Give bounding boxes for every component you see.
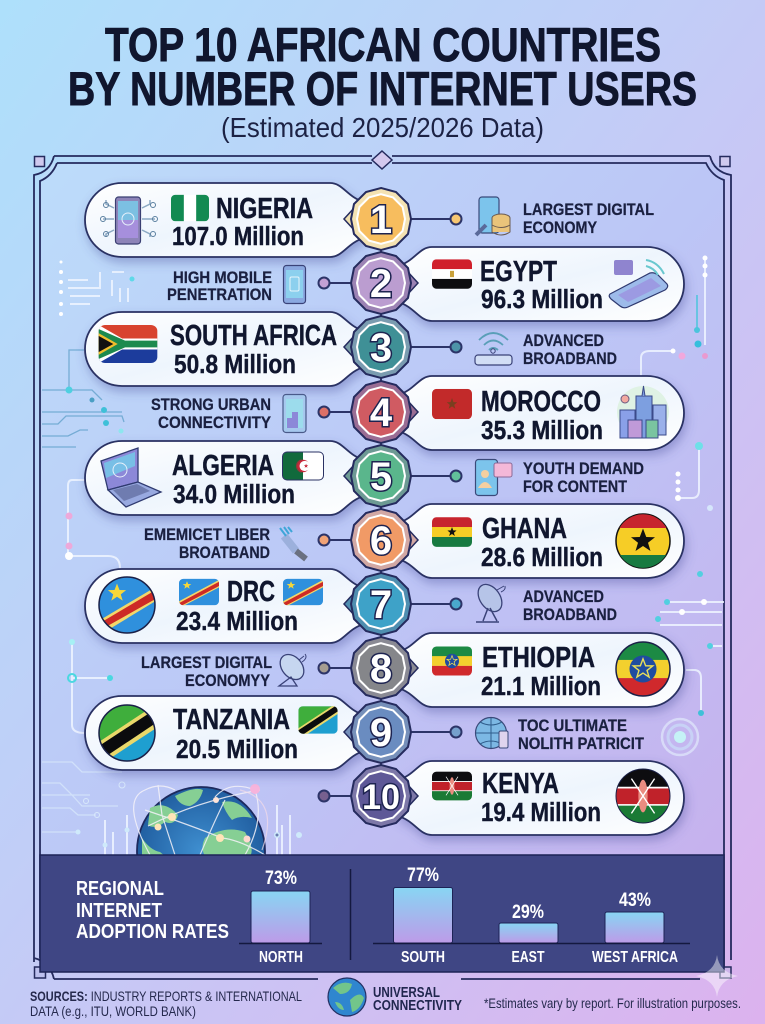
row 9: Tanzania: 20.5 Million bbox=[176, 736, 298, 764]
note 5 bbox=[476, 459, 644, 496]
sources: SOURCES: INDUSTRY REPORTS & INTERNATIONAL bbox=[30, 988, 302, 1004]
flag: Nigeria bbox=[171, 195, 209, 221]
panel heading: ADOPTION RATES bbox=[76, 920, 229, 943]
title: TOP 10 AFRICAN COUNTRIES bbox=[105, 18, 661, 71]
note 2: PENETRATION bbox=[167, 285, 272, 304]
flag: DRC right bbox=[283, 578, 323, 606]
icon: fibre cable bbox=[280, 527, 306, 559]
flag: DRC left bbox=[179, 578, 219, 606]
row 5: Algeria bbox=[85, 441, 364, 515]
note 4 bbox=[151, 394, 306, 432]
row 2: Egypt: EGYPT bbox=[480, 256, 557, 288]
row 3: South Africa: SOUTH AFRICA bbox=[170, 320, 337, 352]
bar chart: adoption rates: 29% bbox=[512, 902, 544, 923]
flag badge: Ghana bbox=[616, 514, 670, 568]
flag: Morocco bbox=[432, 389, 472, 419]
icon: globe and phone bbox=[476, 718, 508, 748]
note 1: LARGEST DIGITAL bbox=[523, 200, 654, 219]
row 8: Ethiopia: ETHIOPIA bbox=[482, 642, 595, 674]
row 6: Ghana: GHANA bbox=[482, 513, 567, 545]
bar chart: adoption rates: SOUTH bbox=[401, 949, 445, 966]
bar chart: adoption rates: WEST AFRICA bbox=[592, 949, 678, 966]
note 3: BROADBAND bbox=[523, 349, 617, 368]
sources bbox=[30, 988, 302, 1019]
universal connectivity logo: CONNECTIVITY bbox=[373, 998, 462, 1014]
rank medallion 2: 2 bbox=[370, 262, 392, 306]
rank medallion 4: 4 bbox=[370, 391, 393, 435]
title bbox=[68, 18, 697, 115]
note 8 bbox=[141, 650, 309, 690]
universal connectivity logo bbox=[328, 978, 462, 1016]
row 1: Nigeria: NIGERIA bbox=[216, 193, 313, 225]
icon: phone with wifi bbox=[609, 260, 668, 308]
note 2: HIGH MOBILE bbox=[173, 268, 272, 287]
note 5: FOR CONTENT bbox=[523, 477, 628, 496]
decorative frame bbox=[34, 151, 731, 979]
row 6: Ghana: 28.6 Million bbox=[481, 544, 603, 572]
row 10: Kenya: 19.4 Million bbox=[481, 799, 601, 827]
rank medallion 8 bbox=[351, 637, 418, 699]
icon: mobile phone bbox=[284, 266, 306, 304]
icon: satellite dish bbox=[473, 580, 507, 622]
bar chart: adoption rates bbox=[239, 865, 690, 966]
rank medallion 7 bbox=[344, 573, 411, 635]
row 4: Morocco: 35.3 Million bbox=[481, 417, 603, 445]
panel heading bbox=[76, 877, 229, 943]
globe illustration bbox=[133, 784, 268, 854]
bar chart: adoption rates: EAST bbox=[512, 949, 545, 966]
note 1: ECONOMY bbox=[523, 218, 598, 237]
flag: Ghana bbox=[432, 517, 472, 548]
icon: smartphone with circuit bbox=[100, 197, 158, 244]
rank medallion 5: 5 bbox=[370, 455, 392, 499]
panel: regional internet adoption rates bbox=[40, 855, 724, 972]
bar chart: adoption rates: 77% bbox=[407, 865, 439, 886]
note 3: ADVANCED bbox=[523, 331, 604, 350]
row 3: South Africa: 50.8 Million bbox=[174, 351, 296, 379]
rank medallion 6: 6 bbox=[370, 519, 392, 563]
row 7: DRC bbox=[85, 569, 364, 643]
rank medallion 9 bbox=[344, 701, 411, 763]
row 1: Nigeria: 107.0 Million bbox=[172, 223, 304, 251]
flag badge: Tanzania bbox=[98, 704, 156, 762]
rank medallion 3 bbox=[344, 316, 411, 378]
flag: Egypt bbox=[432, 259, 472, 289]
row 9: Tanzania: TANZANIA bbox=[173, 704, 290, 736]
panel heading: INTERNET bbox=[76, 899, 162, 922]
icon: phone with city chart bbox=[283, 394, 306, 432]
circuit decoration right bbox=[641, 256, 724, 755]
rank medallion 4 bbox=[351, 381, 418, 443]
note 5: YOUTH DEMAND bbox=[523, 459, 644, 478]
icon: globe bbox=[328, 978, 366, 1016]
icon: wifi router bbox=[475, 333, 512, 365]
row 7: DRC: 23.4 Million bbox=[176, 608, 298, 636]
note 1 bbox=[476, 197, 654, 237]
note 3 bbox=[475, 331, 617, 368]
bar chart: adoption rates: NORTH bbox=[259, 949, 303, 966]
flag: Ethiopia bbox=[432, 646, 472, 676]
rank medallion 7: 7 bbox=[370, 583, 392, 627]
sparkle bbox=[696, 955, 738, 997]
rank medallion 1 bbox=[344, 188, 411, 250]
bar chart: adoption rates: 73% bbox=[265, 868, 297, 889]
row 8: Ethiopia bbox=[398, 633, 684, 707]
row 6: Ghana bbox=[398, 504, 684, 578]
row 4: Morocco bbox=[398, 376, 684, 450]
note 2 bbox=[167, 266, 306, 304]
note 7: ADVANCED bbox=[523, 587, 604, 606]
row 5: Algeria: 34.0 Million bbox=[173, 481, 295, 509]
row 7: DRC: DRC bbox=[227, 576, 275, 608]
icon: satellite dish bbox=[275, 650, 309, 686]
icon: laptop bbox=[101, 448, 161, 507]
note 6: BROATBAND bbox=[179, 543, 270, 562]
rank medallion 5 bbox=[344, 445, 411, 507]
sources: DATA (e.g., ITU, WORLD BANK) bbox=[30, 1003, 196, 1019]
circuit decoration left bbox=[42, 260, 134, 733]
rank medallion 6 bbox=[351, 509, 418, 571]
rank medallion 3: 3 bbox=[370, 326, 392, 370]
rank medallion 2 bbox=[351, 252, 418, 314]
note 9: TOC ULTIMATE bbox=[518, 716, 627, 735]
flag badge: Ethiopia bbox=[615, 641, 671, 697]
connectors between ranks and notes bbox=[318, 214, 462, 802]
panel heading: REGIONAL bbox=[76, 877, 164, 900]
note 6 bbox=[144, 525, 306, 562]
row 1: Nigeria bbox=[85, 183, 364, 257]
flag badge: DRC bbox=[98, 576, 156, 634]
note 4: STRONG URBAN bbox=[151, 395, 271, 414]
note 7 bbox=[473, 580, 617, 624]
flag: Kenya bbox=[432, 772, 472, 801]
row 2: Egypt bbox=[398, 247, 684, 321]
note 9: NOLITH PATRICIT bbox=[518, 734, 645, 753]
note 4: CONNECTIVITY bbox=[158, 413, 272, 432]
flag: Algeria bbox=[283, 452, 323, 480]
row 8: Ethiopia: 21.1 Million bbox=[481, 673, 601, 701]
row 9: Tanzania bbox=[79, 696, 364, 771]
note 7: BROADBAND bbox=[523, 605, 617, 624]
row 10: Kenya bbox=[398, 761, 684, 835]
circuit decoration lower left bbox=[42, 762, 302, 855]
row 5: Algeria: ALGERIA bbox=[172, 450, 274, 482]
note 8: LARGEST DIGITAL bbox=[141, 653, 272, 672]
row 2: Egypt: 96.3 Million bbox=[481, 286, 603, 314]
rank medallion 10 bbox=[351, 765, 418, 827]
flag: Tanzania bbox=[298, 706, 338, 734]
row 3: South Africa bbox=[85, 312, 364, 386]
row 4: Morocco: MOROCCO bbox=[481, 386, 601, 418]
note 8: ECONOMYY bbox=[185, 671, 271, 690]
flag: South Africa bbox=[99, 325, 157, 363]
rank medallion 8: 8 bbox=[370, 647, 392, 691]
bar chart: adoption rates: 43% bbox=[619, 890, 651, 911]
icon: phone and coins bbox=[476, 197, 510, 235]
note 6: EMEMICET LIBER bbox=[144, 525, 270, 544]
icon: phone with chat bbox=[476, 460, 512, 496]
rank medallion 1: 1 bbox=[370, 198, 392, 242]
note 9 bbox=[476, 716, 645, 753]
rank medallion 10: 10 bbox=[362, 778, 400, 817]
flag badge: Kenya bbox=[616, 768, 670, 824]
subtitle: (Estimated 2025/2026 Data) bbox=[221, 112, 544, 143]
rank medallion 9: 9 bbox=[370, 711, 392, 755]
row 10: Kenya: KENYA bbox=[482, 768, 559, 800]
universal connectivity logo: UNIVERSAL bbox=[373, 985, 440, 1001]
icon: city skyline bbox=[617, 386, 669, 438]
